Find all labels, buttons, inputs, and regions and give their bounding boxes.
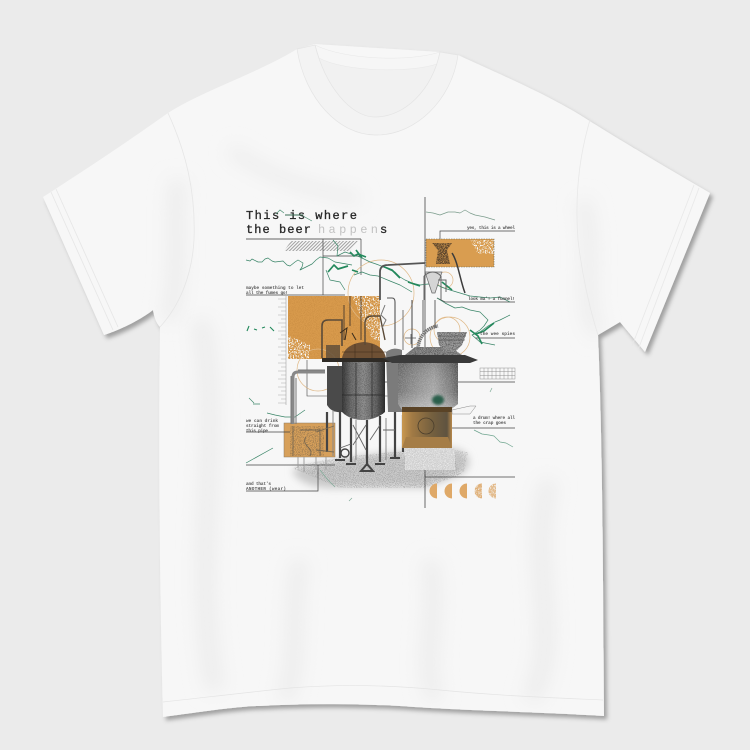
fabric folds bbox=[252, 216, 510, 460]
label: fumes: all the fumes go! bbox=[246, 291, 288, 296]
left vat body bbox=[342, 362, 385, 420]
left vat rim bbox=[322, 358, 392, 362]
orange box: pipe panel bbox=[284, 423, 335, 457]
green vines bbox=[246, 210, 513, 501]
right vat bbox=[383, 347, 478, 410]
right vat top plate bbox=[383, 355, 478, 363]
artwork: brewery print bbox=[246, 197, 515, 508]
small wheel icon bbox=[432, 243, 465, 293]
left vat rivets bbox=[342, 363, 385, 418]
orange box: wheel panel bbox=[426, 239, 494, 267]
measuring ruler bbox=[278, 296, 286, 405]
label: funnel: look ma'! a funnel! bbox=[468, 297, 515, 302]
label: fumes bbox=[246, 286, 304, 296]
label: another: ANOTHER (wear) bbox=[246, 487, 286, 492]
guide lines bbox=[246, 197, 515, 508]
half moons bbox=[430, 483, 497, 499]
label: drum bbox=[473, 416, 515, 426]
label: another: and that's bbox=[246, 482, 271, 487]
label: pipe: straight from bbox=[246, 424, 279, 429]
right vat bump bbox=[405, 347, 462, 355]
label: wheel: yes, this is a wheel bbox=[467, 226, 515, 231]
front collar bbox=[297, 45, 458, 135]
pipe panel machinery bbox=[290, 426, 334, 472]
label: drum: the crap goes bbox=[473, 421, 506, 426]
label: drum: a drum! where all bbox=[473, 416, 515, 421]
hatched parallelogram bbox=[284, 241, 358, 251]
funnel column bbox=[405, 272, 446, 350]
shirt body and sleeves bbox=[43, 44, 710, 717]
left vat dome bbox=[342, 342, 386, 358]
back collar bbox=[315, 45, 440, 70]
neck opening bbox=[315, 46, 440, 117]
label: spies: the wee spies bbox=[480, 332, 515, 337]
t-shirt bbox=[43, 44, 710, 717]
right sleeve seam and hem bbox=[577, 120, 699, 350]
left vat bbox=[322, 342, 392, 420]
label: pipe: this pipe bbox=[246, 429, 268, 434]
wheel machine bbox=[437, 332, 467, 352]
right vat green stain bbox=[432, 395, 444, 405]
bottom hem stitching bbox=[163, 686, 603, 702]
title bbox=[246, 209, 387, 237]
rear vessel bbox=[327, 349, 402, 412]
left sleeve seam and hem bbox=[51, 113, 194, 330]
title: happen bbox=[318, 223, 378, 237]
title: s bbox=[380, 223, 387, 237]
label: another bbox=[246, 482, 286, 492]
label: pipe: we can drink bbox=[246, 419, 278, 424]
furnace bbox=[402, 406, 476, 472]
label: pipe bbox=[246, 419, 279, 434]
title: the beer bbox=[246, 223, 311, 237]
legs and bracing bbox=[327, 410, 403, 471]
right vat body bbox=[398, 362, 458, 410]
title: This is where bbox=[246, 209, 357, 223]
pipework bbox=[291, 263, 425, 424]
ground stipple bbox=[292, 448, 469, 488]
thin orange circles bbox=[297, 260, 470, 391]
grid bbox=[480, 368, 515, 379]
label: fumes: maybe something to let bbox=[246, 286, 304, 291]
orange box: main panel bbox=[288, 296, 384, 359]
